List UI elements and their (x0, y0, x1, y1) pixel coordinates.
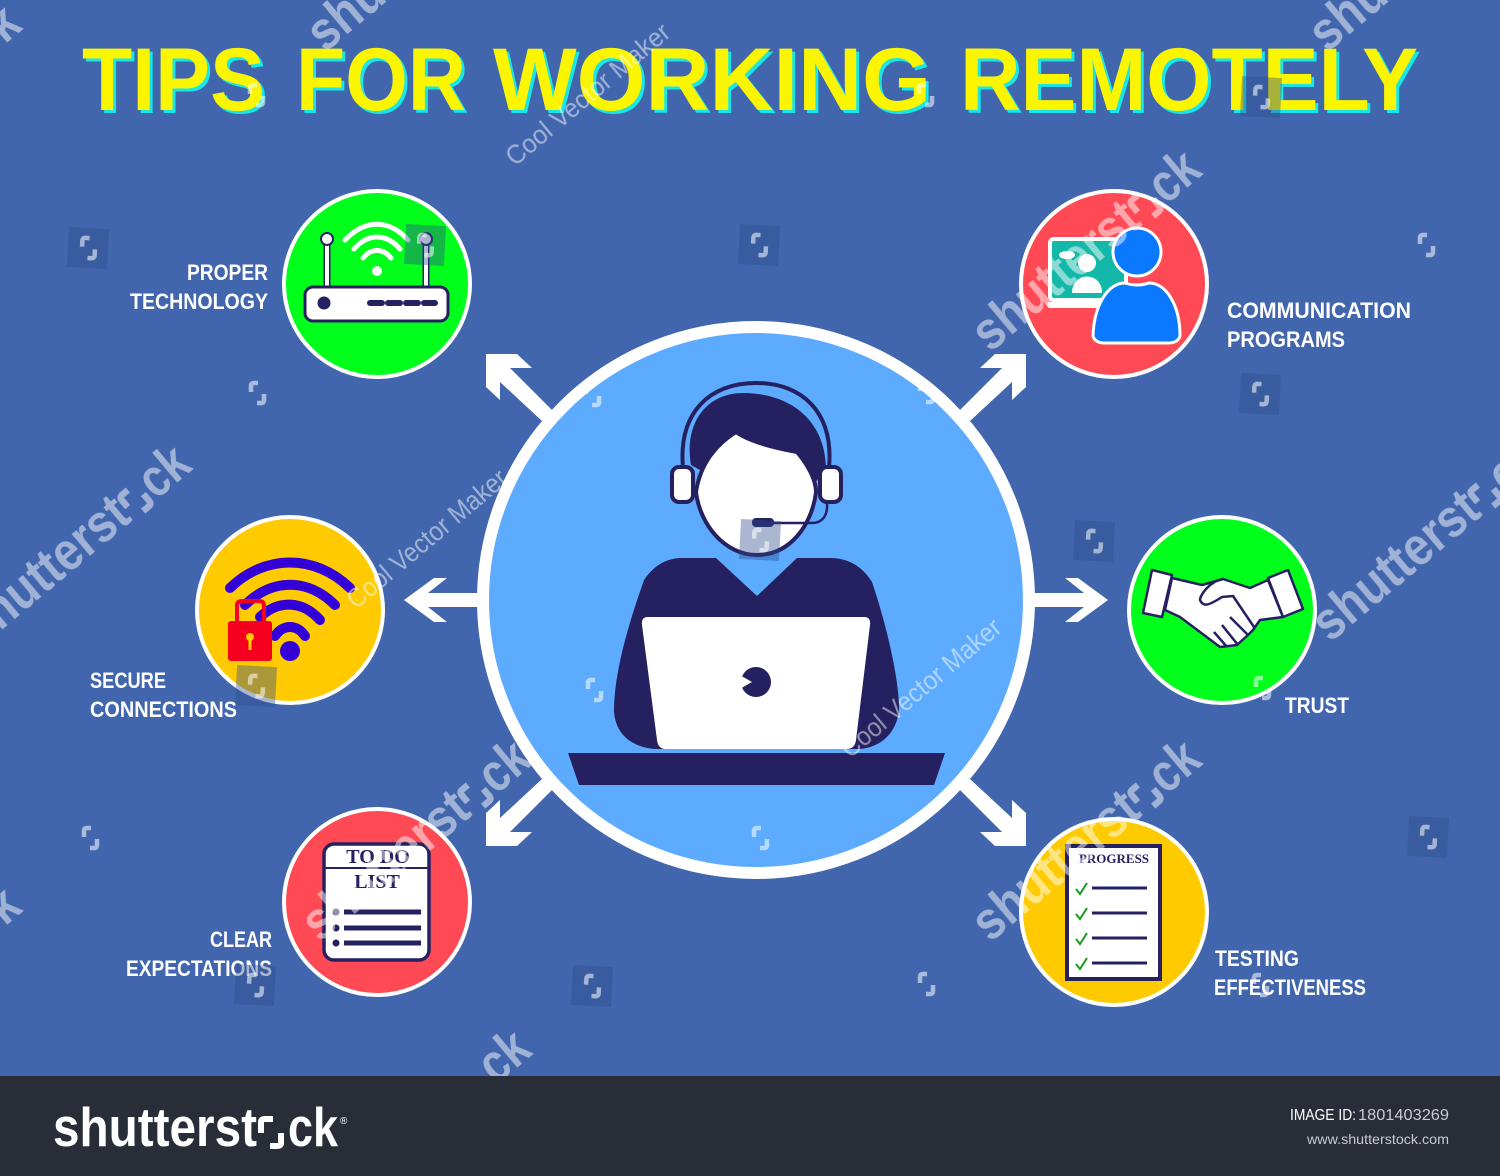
text: website: www.shutterstock.com (1306, 1131, 1449, 1147)
icon: router (305, 224, 448, 321)
icon: to do list: TO DO (346, 846, 410, 868)
watermark small icons (67, 76, 1449, 1007)
icon: router circle (284, 191, 470, 377)
icon: progress sheet: PROGRESS (1079, 851, 1149, 866)
icon: list circle (284, 809, 470, 995)
text: shutterstock logo: ® (340, 1116, 348, 1127)
icon: wifi circle (197, 517, 383, 703)
icon: to do list: LIST (354, 871, 400, 893)
text: clear expectations (126, 927, 272, 981)
arrow: left (404, 578, 482, 622)
text: image id: 1801403269 (1358, 1107, 1449, 1124)
text: communication programs: COMMUNICATION (1227, 298, 1411, 323)
text: testing effectiveness: EFFECTIVENESS (1214, 975, 1366, 1000)
icon: handshake (1143, 570, 1303, 647)
title: TIPS (82, 29, 265, 129)
watermark overlay: ck (1135, 726, 1212, 805)
title: WORKING (496, 32, 934, 132)
arrow: upper left (486, 354, 552, 421)
text: image id: IMAGE ID: (1290, 1107, 1356, 1124)
panel: testing effectiveness (1021, 819, 1366, 1005)
icon: video call (1047, 228, 1180, 343)
title (82, 29, 1421, 132)
icon: to do list (324, 844, 429, 960)
text: clear expectations: CLEAR (210, 927, 272, 952)
title: REMOTELY (960, 29, 1418, 129)
panel: trust (1129, 517, 1349, 718)
text: proper technology: TECHNOLOGY (130, 289, 268, 314)
icon: headset (672, 383, 841, 527)
arrow: right (1030, 578, 1108, 622)
watermark overlay: ck (125, 431, 202, 510)
text: trust: TRUST (1285, 693, 1349, 718)
text: image id (1290, 1107, 1449, 1124)
watermark overlay: Cool Vector Maker (341, 463, 513, 615)
title: WORKING (493, 29, 931, 129)
text: proper technology (130, 260, 268, 314)
watermark overlay: shutterst (959, 188, 1151, 362)
icon: laptop (642, 617, 870, 749)
text: shutterstock logo: shutterst (53, 1096, 257, 1158)
text: testing effectiveness (1214, 946, 1366, 1000)
title: FOR (299, 32, 469, 132)
panel: secure connections (90, 517, 383, 722)
text: shutterstock logo: ck (288, 1096, 338, 1158)
text: secure connections: CONNECTIONS (90, 697, 237, 722)
icon: face (696, 432, 816, 555)
text: proper technology: PROPER (187, 260, 268, 285)
arrows from centre (404, 354, 1108, 846)
watermark overlay: shutterst (959, 778, 1151, 952)
watermark overlay: ck (465, 726, 542, 805)
watermark overlay: ck (465, 1016, 542, 1095)
icon: communication circle (1021, 191, 1207, 377)
icon: progress sheet (1067, 846, 1160, 979)
text: communication programs (1227, 298, 1411, 352)
title: REMOTELY (963, 32, 1421, 132)
panel: proper technology (130, 191, 470, 377)
arrow: upper right (960, 354, 1026, 421)
icon: trust circle (1129, 517, 1315, 703)
icon: desk (568, 753, 945, 785)
watermark overlay: shutterst (289, 778, 481, 952)
panel: communication programs (1021, 191, 1411, 377)
text: clear expectations: EXPECTATIONS (126, 956, 272, 981)
text: secure connections: SECURE (90, 668, 166, 693)
arrow: lower right (960, 779, 1026, 846)
text: testing effectiveness: TESTING (1215, 946, 1299, 971)
text: secure connections (90, 668, 237, 722)
text: communication programs: PROGRAMS (1227, 327, 1345, 352)
icon: progress circle (1021, 819, 1207, 1005)
panel: central worker (483, 327, 1029, 873)
footer bar (0, 1076, 1500, 1176)
icon: body (614, 558, 899, 749)
watermark overlay: ck (1135, 136, 1212, 215)
watermark overlay: Cool Vector Maker (835, 612, 1007, 764)
watermark overlay: Cool Vector Maker (500, 17, 676, 172)
icon: hair (690, 393, 826, 486)
title: TIPS (85, 32, 268, 132)
arrow: lower left (486, 779, 552, 846)
panel: clear expectations (126, 809, 470, 995)
icon: wifi and lock (228, 562, 350, 661)
title: FOR (296, 29, 466, 129)
